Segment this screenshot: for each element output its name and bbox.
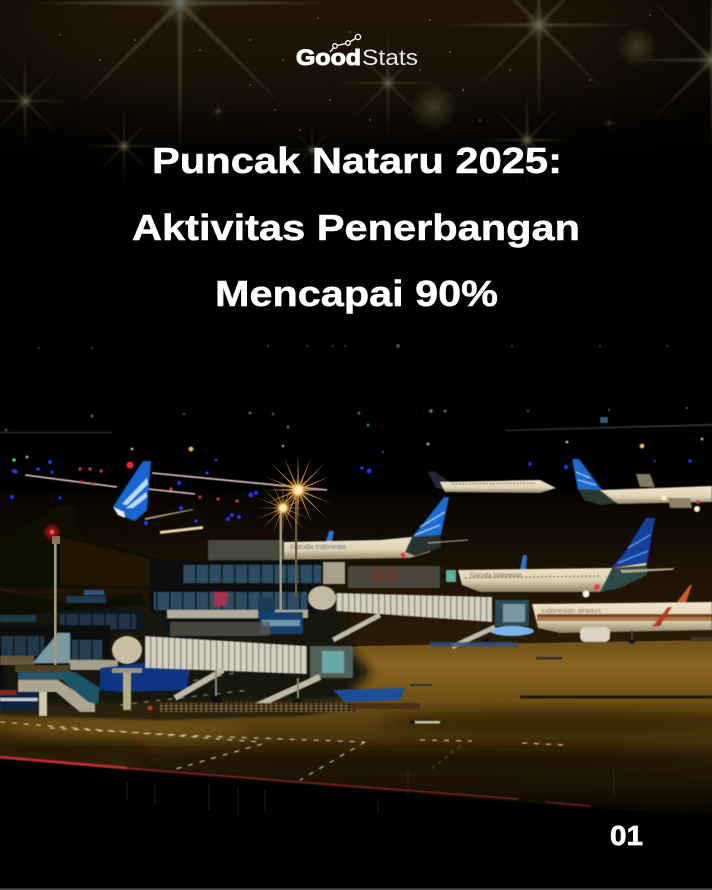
title <box>132 140 580 314</box>
terminal building windows <box>0 540 322 710</box>
retro Garuda airplane: Indonesian airways <box>541 608 601 615</box>
GoodStats logo: Stats <box>362 45 418 70</box>
fence silhouettes <box>127 770 614 815</box>
decorative sparkling stars <box>0 0 712 190</box>
GoodStats logo: Good <box>296 45 361 70</box>
title: Mencapai 90% <box>215 273 498 314</box>
left blue airplane tail <box>113 461 151 521</box>
distant airport lights on the horizon <box>0 344 712 458</box>
center airplane at the gate <box>283 497 468 560</box>
terminal roof <box>0 506 180 615</box>
far airplane <box>428 471 556 493</box>
right far airplane with blue tail <box>572 459 712 512</box>
lamp posts with starburst <box>45 454 332 665</box>
retro Garuda airplane <box>532 585 712 644</box>
apron markings and red light trail <box>0 657 712 806</box>
gate airplane right <box>458 518 675 598</box>
title: Puncak Nataru 2025: <box>152 140 562 181</box>
bottom edge line <box>0 888 712 890</box>
light trails and runway lights <box>10 451 692 534</box>
title: Aktivitas Penerbangan <box>132 207 580 248</box>
page number: 01 <box>610 820 643 851</box>
center airplane at the gate: Garuda Indonesia <box>290 544 346 551</box>
jet bridge far <box>308 562 534 647</box>
boarding building left <box>15 665 100 716</box>
apron surface and ground <box>0 490 712 815</box>
gate airplane right: Garuda Indonesia <box>470 572 522 579</box>
GoodStats logo <box>296 34 418 70</box>
jet bridge near with stairs <box>112 622 420 712</box>
